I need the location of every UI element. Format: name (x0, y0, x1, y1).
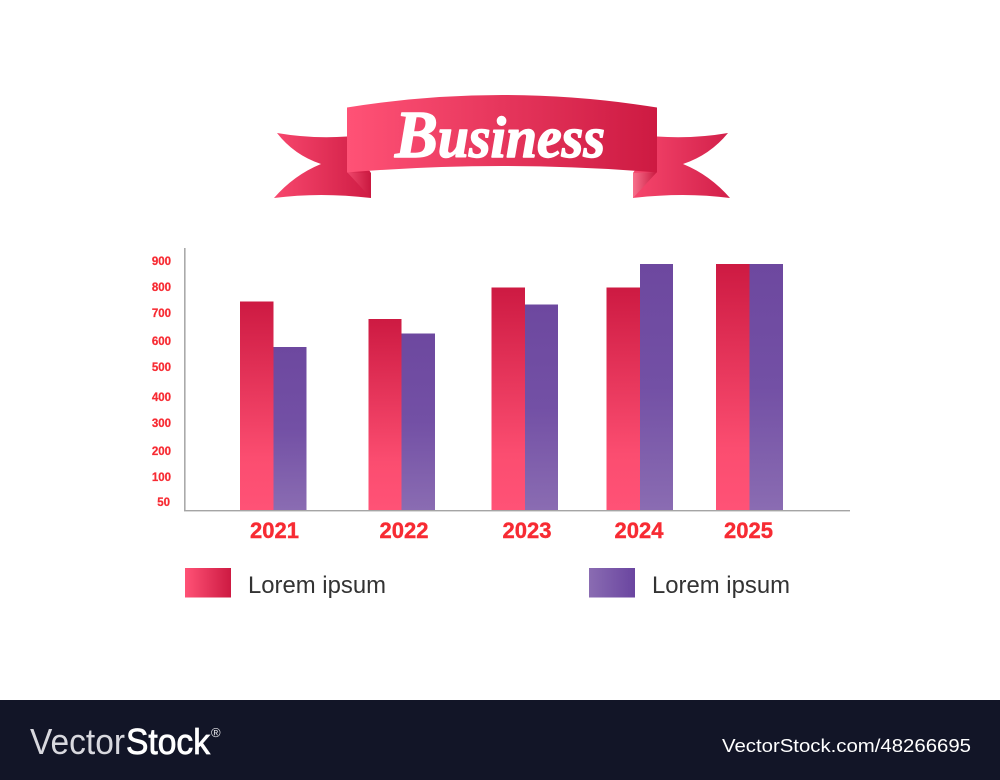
bars 2024 (606, 264, 673, 510)
y axis labels: 400 (152, 392, 171, 404)
footer bar (0, 700, 1000, 780)
footer logo (30, 721, 211, 762)
ribbon main band (347, 95, 657, 172)
y axis labels: 100 (152, 472, 171, 484)
legend label purple: Lorem ipsum (652, 572, 790, 599)
footer url: VectorStock.com/48266695 (722, 736, 971, 756)
x axis year labels: 2021 (250, 518, 299, 543)
x axis year labels: 2024 (615, 518, 664, 543)
y axis labels (152, 256, 171, 509)
y axis labels: 300 (152, 418, 171, 430)
x axis year labels (250, 518, 773, 543)
footer logo: Stock (126, 721, 211, 762)
y axis labels: 900 (152, 256, 171, 268)
ribbon left tail (274, 133, 371, 198)
registered mark: ® (211, 725, 221, 740)
ribbon left fold (347, 172, 371, 198)
legend swatch purple (589, 568, 635, 598)
y axis labels: 50 (157, 497, 170, 509)
x axis year labels: 2022 (380, 518, 428, 543)
bars 2023 (492, 288, 558, 510)
y axis (184, 248, 186, 511)
y axis labels: 700 (152, 308, 171, 320)
banner title: Business (394, 98, 605, 172)
y axis labels: 600 (152, 336, 171, 348)
x axis (184, 510, 850, 511)
y axis labels: 500 (152, 362, 171, 374)
legend swatch red (185, 568, 231, 598)
legend label red: Lorem ipsum (248, 572, 386, 599)
footer logo: Vector (30, 721, 125, 762)
bar chart (152, 248, 850, 543)
bars 2025 (716, 264, 783, 510)
y axis labels: 800 (152, 282, 171, 294)
ribbon banner (274, 95, 730, 198)
bars 2022 (368, 319, 435, 510)
bars 2021 (240, 302, 306, 510)
x axis year labels: 2025 (724, 518, 773, 543)
legend (185, 568, 790, 599)
y axis labels: 200 (152, 446, 171, 458)
x axis year labels: 2023 (503, 518, 551, 543)
ribbon right fold (633, 172, 657, 198)
ribbon right tail (633, 133, 730, 198)
